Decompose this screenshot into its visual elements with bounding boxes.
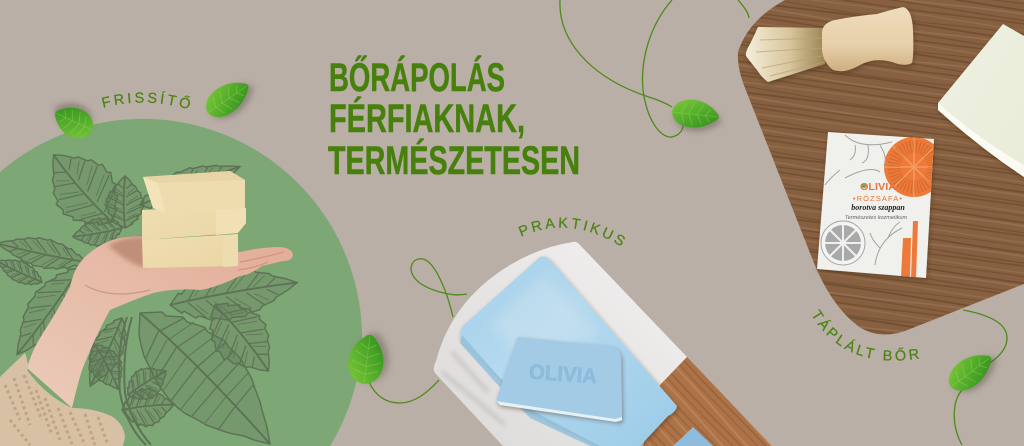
small blue soap with logo: OLIVIA xyxy=(528,361,598,388)
title: TERMÉSZETESEN xyxy=(328,138,580,183)
label: frissítő: FRISSÍTŐ xyxy=(102,91,190,108)
label: praktikus: PRAKTIKUS xyxy=(518,218,625,246)
grey citrus xyxy=(821,221,865,265)
box brand text xyxy=(845,183,907,219)
soap top xyxy=(143,171,245,213)
vine: top with leaf xyxy=(560,0,749,137)
icon: mint leaf left xyxy=(49,100,98,144)
icon: mint leaf right xyxy=(200,73,255,124)
vine: right with leaf xyxy=(954,310,1007,445)
large blue soap xyxy=(460,256,677,446)
panel: wooden board xyxy=(738,0,1024,335)
box brand text: Természetes kozmetikum xyxy=(845,215,907,221)
orange bars xyxy=(901,221,918,278)
icon: mint leaf right xyxy=(942,346,999,398)
icon: mint leaf top xyxy=(671,98,720,130)
title: FÉRFIAKNAK, xyxy=(329,96,525,141)
soap middle xyxy=(142,206,246,240)
finger creases xyxy=(85,252,284,294)
sweater sleeve xyxy=(0,353,125,446)
palm shadow xyxy=(108,237,145,268)
panel: marble board with blue soap xyxy=(434,242,772,446)
box brand text: OLIVIA xyxy=(860,181,896,193)
illustration: engraved mint plant xyxy=(0,134,301,445)
label: táplált bőr: TÁPLÁLT BŐR xyxy=(812,308,920,361)
small blue soap with logo xyxy=(497,337,622,422)
marble xyxy=(434,242,687,446)
arm and hand xyxy=(27,236,293,408)
shaving brush xyxy=(746,7,913,82)
small blue soap corner xyxy=(673,427,713,446)
wood strip xyxy=(643,357,772,446)
white soap xyxy=(938,24,1024,177)
box brand text: borotva szappan xyxy=(851,203,905,212)
soap box xyxy=(817,132,944,278)
soap bottom xyxy=(142,234,238,268)
title: BŐRÁPOLÁS xyxy=(329,54,505,100)
icon: mint leaf bottom centre xyxy=(346,333,387,386)
vine: praktikus loop xyxy=(369,259,467,403)
panel: green circle xyxy=(0,119,362,446)
orange citrus xyxy=(884,138,934,197)
box brand text: •RÓZSAFA• xyxy=(853,194,903,203)
title xyxy=(328,54,580,183)
illustration: hand with soap stack xyxy=(0,171,293,446)
botanical sketches xyxy=(825,135,902,265)
